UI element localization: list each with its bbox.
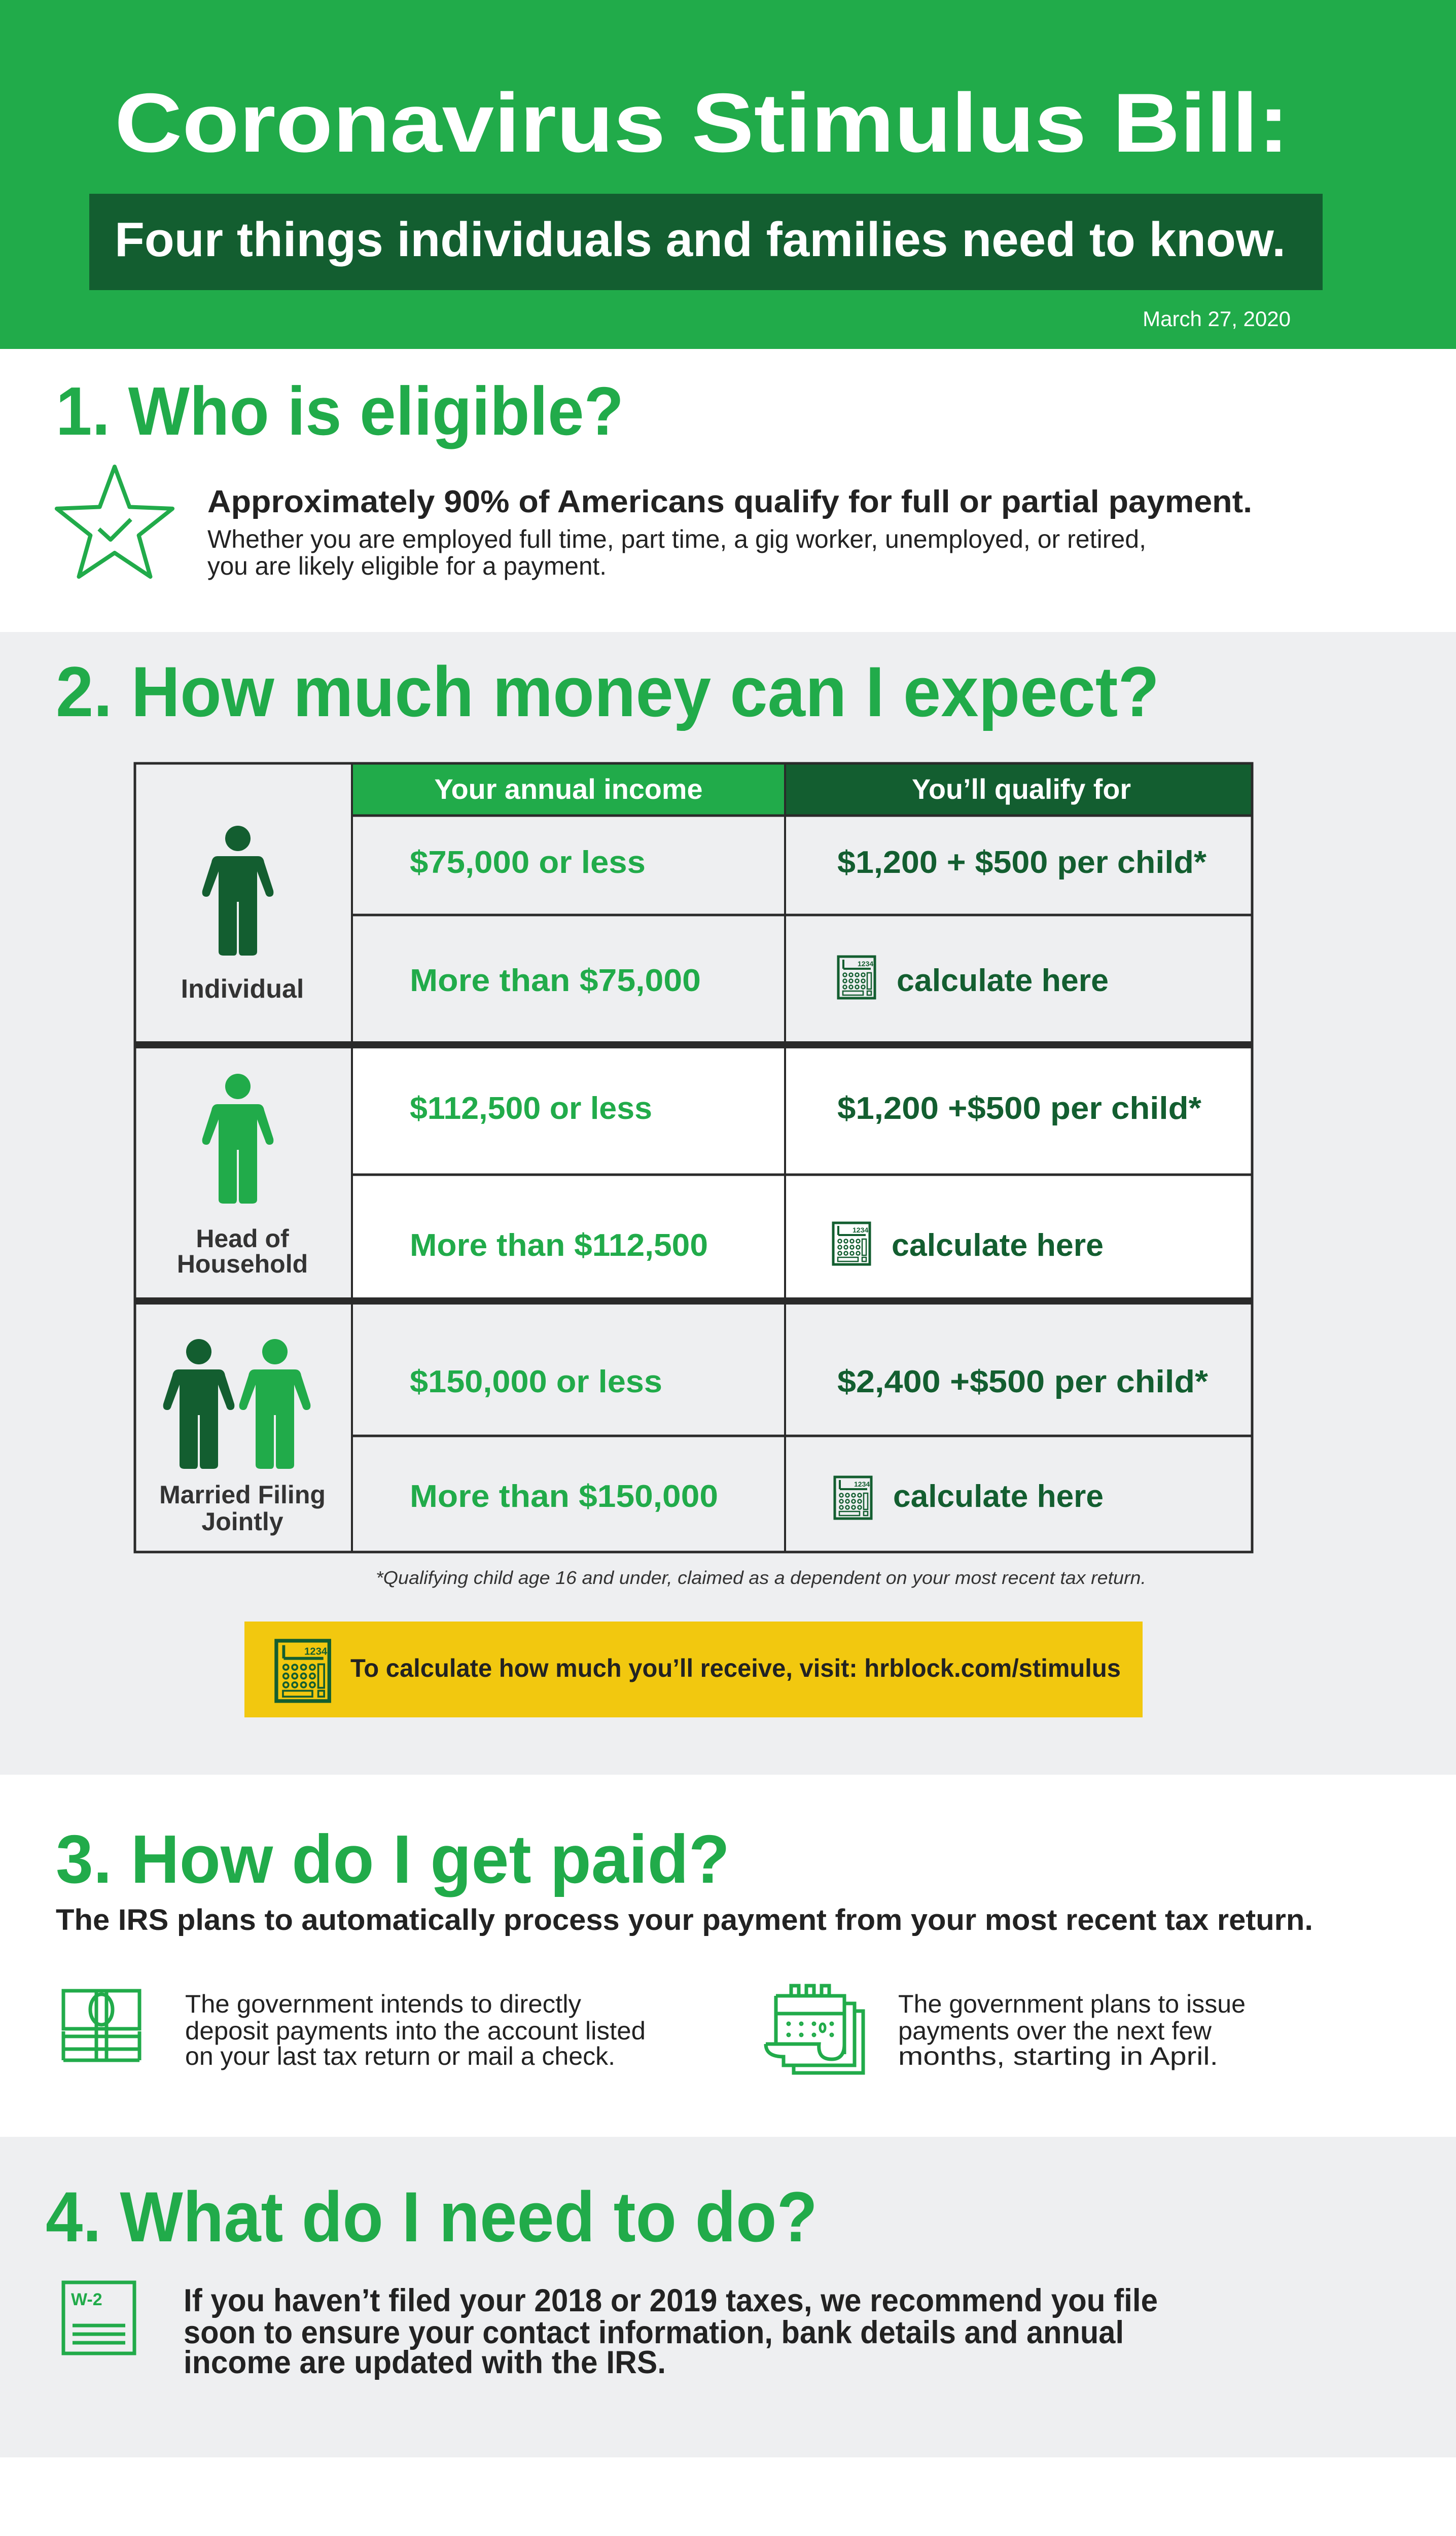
table (135, 763, 1252, 1552)
subtitle box (89, 194, 1323, 290)
row: individual (181, 826, 1207, 1004)
heading 2: 2. How much money can I expect? (56, 652, 1159, 731)
icon: individual person (202, 826, 273, 956)
row: individual: calculate here (897, 963, 1109, 998)
icon: head of household person (202, 1074, 273, 1204)
icon: money (63, 1991, 139, 2060)
table header (352, 763, 1252, 816)
table header: Your annual income (434, 773, 703, 805)
text: timing: The government plans to issue (898, 1990, 1246, 2018)
section 1: who is eligible (56, 373, 1252, 580)
row: married filing jointly (159, 1339, 1209, 1536)
header banner (0, 0, 1456, 349)
row: married filing jointly: Jointly (201, 1507, 283, 1536)
eligibility text: Whether you are employed full time, part time, a gig worker, unemployed, or retired, (207, 525, 1146, 553)
row: individual: $1,200 + $500 per child* (837, 845, 1207, 880)
text: filing advice: income are updated with the IRS. (184, 2345, 666, 2380)
row: individual: Individual (181, 974, 304, 1004)
text: filing advice (184, 2283, 1158, 2380)
row: head of household (177, 1074, 1202, 1278)
text: filing advice: If you haven’t filed your 2018 or 2019 taxes, we recommend you file (184, 2283, 1158, 2318)
row: married filing jointly: $2,400 +$500 per child* (837, 1364, 1209, 1399)
icon: two people (163, 1339, 310, 1469)
row: head of household: Household (177, 1250, 308, 1278)
heading 4: 4. What do I need to do? (46, 2177, 818, 2257)
text: direct deposit: on your last tax return or mail a check. (185, 2042, 615, 2070)
eligibility text: you are likely eligible for a payment. (207, 552, 607, 580)
icon: W-2 form: W-2 (71, 2290, 102, 2309)
text: direct deposit: The government intends to directly (185, 1990, 581, 2018)
section 4: what do I need to do (0, 2137, 1456, 2457)
icon: W-2 form (63, 2282, 134, 2353)
text: direct deposit: deposit payments into the account listed (185, 2017, 646, 2045)
row: married filing jointly: calculate here (893, 1479, 1104, 1514)
title: Coronavirus Stimulus Bill: (115, 76, 1289, 169)
callout: calculate link (244, 1622, 1143, 1717)
eligibility text: Approximately 90% of Americans qualify for full or partial payment. (207, 484, 1252, 519)
heading 1: 1. Who is eligible? (56, 373, 624, 449)
date: March 27, 2020 (1143, 307, 1291, 331)
text: direct deposit (185, 1990, 646, 2070)
text: filing advice: soon to ensure your contact information, bank details and annual (184, 2315, 1124, 2350)
text: timing: payments over the next few (898, 2017, 1212, 2045)
row: married filing jointly: More than $150,000 (410, 1479, 718, 1514)
row: married filing jointly: $150,000 or less (410, 1364, 662, 1399)
row: head of household: $112,500 or less (410, 1091, 652, 1126)
eligibility text (207, 484, 1252, 580)
text: timing: months, starting in April. (898, 2042, 1218, 2070)
row: head of household: $1,200 +$500 per child* (837, 1091, 1202, 1126)
row: married filing jointly: Married Filing (159, 1481, 326, 1509)
section 3: how do I get paid (56, 1821, 1313, 2073)
section 3: how do I get paid: The IRS plans to automatically process your payment from your most recent tax return. (56, 1904, 1313, 1936)
icon: calendar (766, 1986, 863, 2073)
subtitle box: Four things individuals and families need to know. (115, 213, 1286, 267)
icon: star with check (57, 467, 172, 577)
callout: calculate link: To calculate how much you’ll receive, visit: hrblock.com/stimulus (350, 1654, 1121, 1682)
heading 3: 3. How do I get paid? (56, 1821, 730, 1897)
row: head of household: calculate here (892, 1228, 1104, 1263)
section 2: how much money (0, 632, 1456, 1775)
row: individual: More than $75,000 (410, 963, 701, 998)
table header: You’ll qualify for (912, 773, 1131, 805)
footnote: *Qualifying child age 16 and under, claimed as a dependent on your most recent tax return. (376, 1567, 1146, 1588)
row: individual: $75,000 or less (410, 845, 646, 880)
row: head of household: More than $112,500 (410, 1228, 708, 1263)
row: head of household: Head of (196, 1224, 289, 1253)
text: timing (898, 1990, 1246, 2070)
